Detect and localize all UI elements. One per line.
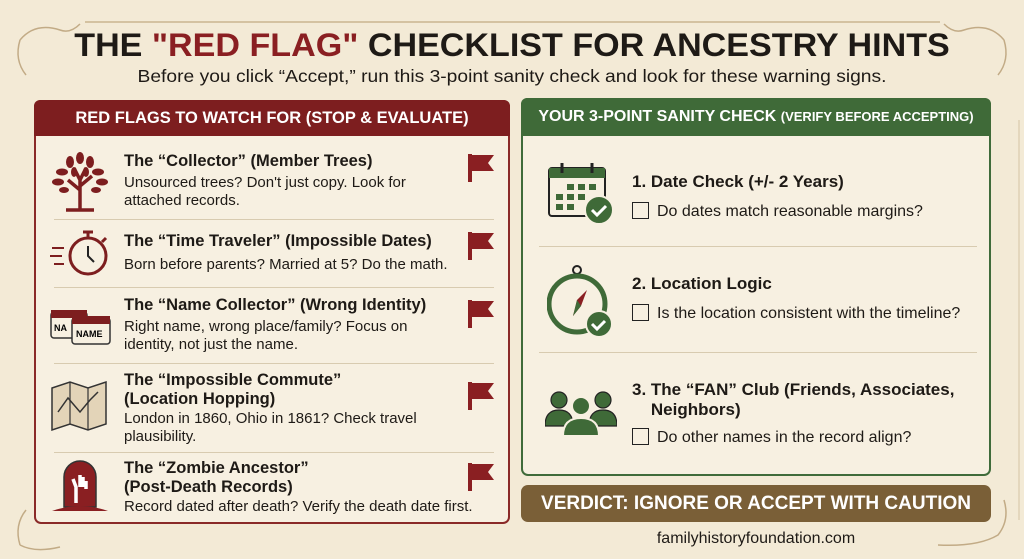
item: location logic: Is the location consistent with the timeline? (657, 305, 960, 322)
icon: name tags (50, 310, 111, 345)
item: zombie ancestor: (Post-Death Records) (124, 478, 293, 496)
icon: name tags: NAME (76, 329, 102, 339)
item: time traveler: Born before parents? Married at 5? Do the math. (124, 256, 448, 273)
item: time traveler: The “Time Traveler” (Impossible Dates) (124, 232, 432, 250)
item: FAN club: Neighbors) (651, 400, 741, 419)
icon: tree (52, 152, 108, 212)
icon: flag (468, 300, 494, 328)
item: date check (548, 163, 923, 223)
panel: sanity check (521, 98, 991, 476)
verdict bar: VERDICT: IGNORE OR ACCEPT WITH CAUTION (541, 493, 971, 514)
item: collector (52, 152, 494, 212)
item: zombie ancestor (52, 459, 494, 515)
item: date check: Do dates match reasonable margins? (657, 203, 923, 220)
item: impossible commute: London in 1860, Ohio in 1861? Check travel (124, 410, 417, 427)
red flags header: RED FLAGS TO WATCH FOR (STOP & EVALUATE) (75, 109, 469, 127)
item: zombie ancestor: The “Zombie Ancestor” (124, 459, 309, 477)
verdict bar (521, 485, 991, 522)
icon: gravestone (52, 460, 108, 511)
icon: name tags: NA (54, 323, 67, 333)
item: name collector: The “Name Collector” (Wrong Identity) (124, 296, 426, 314)
item: FAN club: 3. The “FAN” Club (Friends, Associates, (632, 380, 954, 399)
item: impossible commute: (Location Hopping) (124, 390, 275, 408)
item: date check: 1. Date Check (+/- 2 Years) (632, 172, 844, 191)
item: collector: Unsourced trees? Don't just copy. Look for (124, 174, 406, 191)
item: impossible commute: plausibility. (124, 428, 196, 445)
icon: map (51, 381, 107, 431)
icon: compass (547, 265, 611, 336)
item: name collector (50, 296, 494, 353)
title: THE "RED FLAG" CHECKLIST FOR ANCESTRY HINTS (74, 27, 950, 63)
icon: calendar (548, 163, 612, 223)
red flags header (34, 100, 510, 136)
icon: flag (468, 232, 494, 260)
icon: flag (468, 463, 494, 491)
item: time traveler (50, 230, 494, 276)
item: collector: The “Collector” (Member Trees) (124, 152, 372, 170)
item: zombie ancestor: Record dated after death? Verify the death date first. (124, 498, 473, 515)
item: location logic: 2. Location Logic (632, 274, 772, 293)
item: name collector: identity, not just the name. (124, 336, 298, 353)
item: impossible commute (51, 371, 494, 445)
footer url: familyhistoryfoundation.com (657, 530, 855, 547)
sanity check header (521, 98, 991, 136)
icon: flag (468, 382, 494, 410)
item: FAN club: Do other names in the record align? (657, 429, 911, 446)
subtitle: Before you click “Accept,” run this 3-point sanity check and look for these warning signs. (138, 66, 886, 86)
item: FAN club (545, 380, 954, 446)
item: location logic (547, 265, 960, 336)
panel: red flags (34, 100, 510, 524)
icon: people (545, 391, 617, 435)
sanity check header: YOUR 3-POINT SANITY CHECK (VERIFY BEFORE ACCEPTING) (538, 108, 974, 125)
item: name collector: Right name, wrong place/family? Focus on (124, 318, 407, 335)
item: collector: attached records. (124, 192, 240, 209)
icon: stopwatch (50, 230, 108, 276)
item: impossible commute: The “Impossible Commute” (124, 371, 341, 389)
icon: flag (468, 154, 494, 182)
